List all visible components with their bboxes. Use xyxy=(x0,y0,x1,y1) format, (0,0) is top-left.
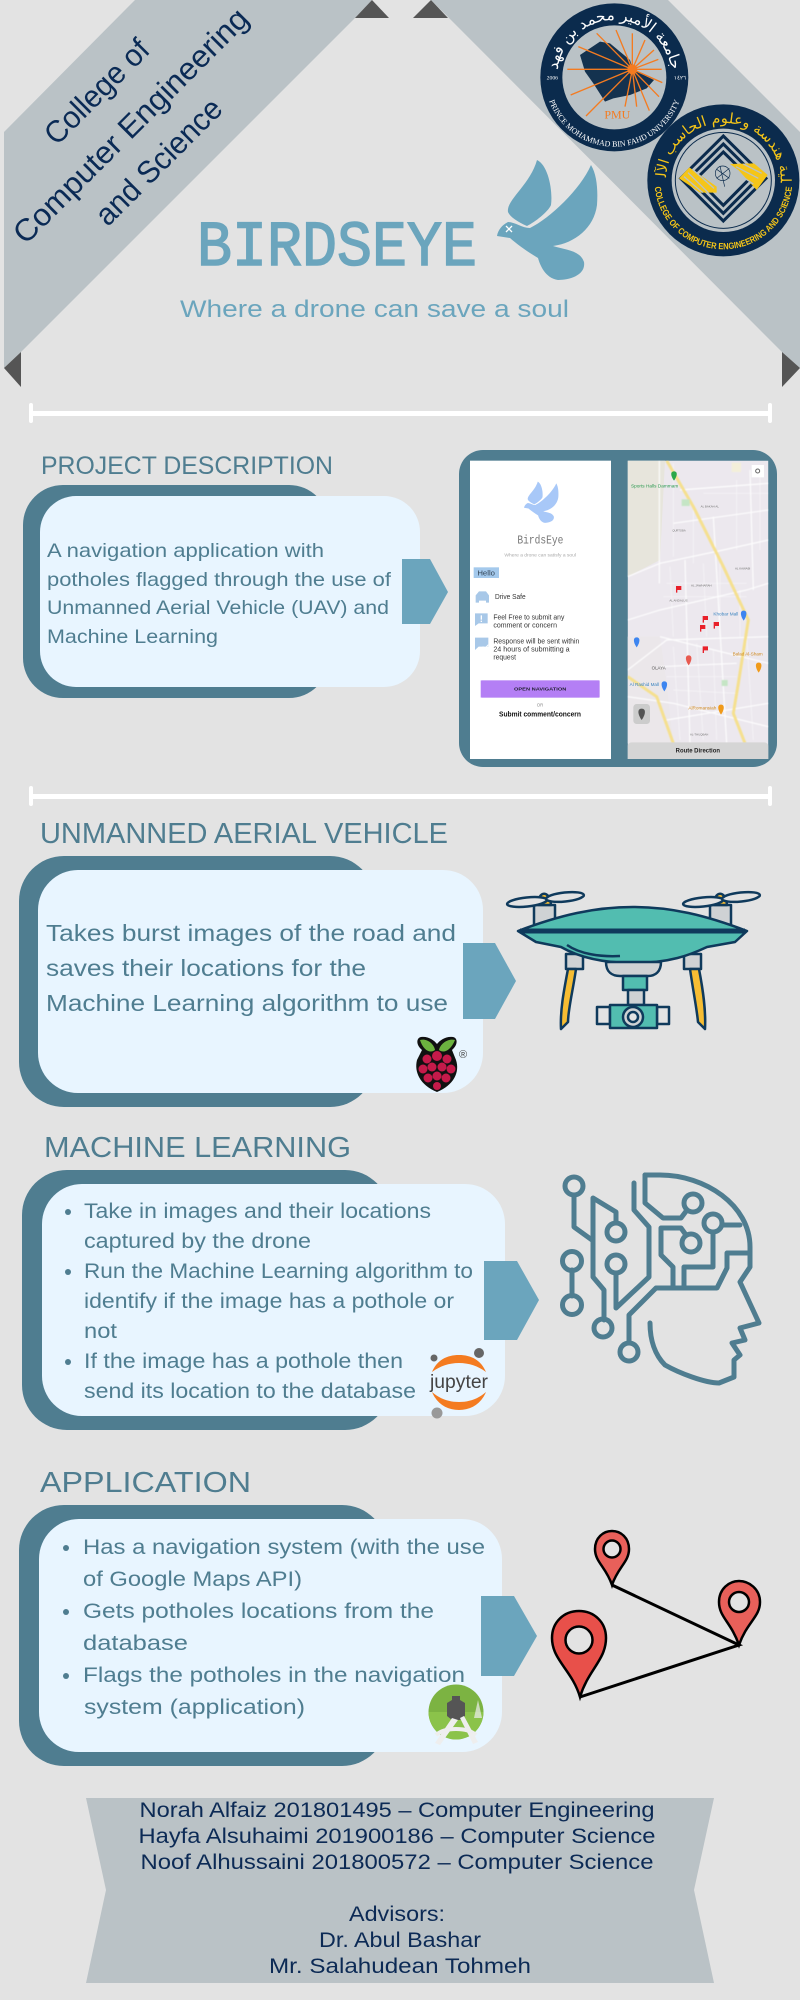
application bullet list xyxy=(63,1536,485,1719)
authors: Norah Alfaiz 201801495 – Computer Engineering xyxy=(140,1799,654,1822)
icon: raspberry pi: ® xyxy=(459,1049,467,1061)
arrow xyxy=(402,559,448,624)
icon: jupyter xyxy=(429,1348,489,1418)
advisors: Dr. Abul Bashar xyxy=(319,1929,481,1952)
pin: right xyxy=(719,1581,760,1645)
panel: project description xyxy=(23,485,420,698)
phone screen: home: OPEN NAVIGATION xyxy=(514,687,567,693)
application bullet list: Flags the potholes in the navigation xyxy=(83,1664,465,1687)
arrow xyxy=(484,1261,539,1340)
phone screen: home: comment or concern xyxy=(493,620,557,629)
application bullet list: database xyxy=(83,1632,188,1655)
phone screen: map: AL-THUQBAH xyxy=(690,733,708,737)
divider xyxy=(29,786,772,806)
phone screen: map: Route Direction xyxy=(676,747,720,754)
advisors: Mr. Salahudean Tohmeh xyxy=(269,1955,531,1978)
tagline: Where a drone can save a soul xyxy=(180,296,569,323)
college name: College of xyxy=(37,32,157,151)
machine learning bullet list: Take in images and their locations xyxy=(84,1200,431,1223)
phone screen: map: AL ANDALUS xyxy=(669,598,688,602)
phone screen: map: Khobar Mall xyxy=(713,612,738,618)
icon: dove logo xyxy=(497,160,597,280)
camera gimbal xyxy=(597,962,669,1028)
advisors xyxy=(269,1903,531,1978)
icon: jupyter: jupyter xyxy=(429,1372,489,1393)
college name: and Science xyxy=(88,91,229,232)
authors xyxy=(138,1799,656,1874)
application bullet list: system (application) xyxy=(84,1696,305,1719)
machine learning bullet list: If the image has a pothole then xyxy=(84,1350,403,1373)
machine learning bullet list: Run the Machine Learning algorithm to xyxy=(84,1260,473,1283)
phone screen: home: Hello xyxy=(477,569,495,578)
pin: large xyxy=(552,1611,606,1697)
icon: drone xyxy=(507,891,760,1029)
logo: College of Computer Engineering and Science: COLLEGE OF COMPUTER ENGINEERING AND SCIENCE xyxy=(654,186,792,250)
phone screen: home: OR xyxy=(537,702,543,707)
panel: application screenshots xyxy=(459,450,777,767)
logo: Prince Mohammad Bin Fahd University: جامعة الأمير محمد بن فهد xyxy=(552,14,680,70)
machine learning bullet list: identify if the image has a pothole or xyxy=(84,1290,454,1313)
phone screen: map xyxy=(628,461,768,759)
logo: Prince Mohammad Bin Fahd University: 2006 xyxy=(547,75,558,81)
phone screen: home: request xyxy=(493,652,516,661)
icon: raspberry pi xyxy=(416,1037,467,1092)
phone screen: map: Sports Halls Dammam xyxy=(631,483,678,489)
phone screen: map: QURTOBA xyxy=(672,528,686,532)
left ribbon banner xyxy=(4,0,389,387)
application bullet list: Has a navigation system (with the use xyxy=(83,1536,485,1559)
phone screen: home xyxy=(470,461,611,759)
phone screen: map: AL BAKAH AL xyxy=(701,504,719,508)
drone body xyxy=(518,907,747,963)
logo: Prince Mohammad Bin Fahd University: PMU xyxy=(604,107,631,121)
project description text: Machine Learning xyxy=(47,626,218,648)
machine learning bullet list: send its location to the database xyxy=(84,1380,416,1403)
logo: College of Computer Engineering and Science xyxy=(647,104,800,256)
logo: Prince Mohammad Bin Fahd University: PRINCE MOHAMMAD BIN FAHD UNIVERSITY xyxy=(549,99,679,147)
phone screen: home: Response will be sent within xyxy=(493,636,579,645)
panel: machine learning xyxy=(22,1170,505,1430)
project description text: A navigation application with xyxy=(47,540,324,562)
left rotor xyxy=(507,891,584,925)
phone screen: home: Feel Free to submit any xyxy=(493,612,565,621)
icon: android studio xyxy=(428,1684,484,1745)
heading: machine learning: MACHINE LEARNING xyxy=(44,1132,351,1164)
divider xyxy=(29,403,772,423)
phone screen: map: AL JAWHARAH xyxy=(691,583,712,587)
machine learning bullet list: captured by the drone xyxy=(84,1230,311,1253)
phone screen: map: AlRomansiah xyxy=(688,706,717,711)
phone screen: map: OLAYA xyxy=(652,665,667,670)
panel: unmanned aerial vehicle xyxy=(19,856,483,1107)
pin: top xyxy=(595,1531,629,1585)
machine learning bullet list xyxy=(65,1200,473,1403)
right ribbon banner xyxy=(413,0,800,387)
UAV description text: saves their locations for the xyxy=(46,955,366,981)
college name: Computer Engineering xyxy=(6,1,255,250)
icon: AI head xyxy=(562,1175,759,1383)
authors: Hayfa Alsuhaimi 201900186 – Computer Science xyxy=(138,1825,656,1848)
arrow xyxy=(463,943,516,1019)
UAV description text xyxy=(46,920,456,1016)
machine learning bullet list: not xyxy=(84,1320,117,1343)
phone screen: home: Drive Safe xyxy=(495,592,526,601)
logo: Prince Mohammad Bin Fahd University xyxy=(540,3,688,152)
arrow xyxy=(481,1596,537,1676)
phone screen: map: Balad Al-Sham xyxy=(733,652,763,657)
phone screen: home: Where a drone can satisfy a soul xyxy=(504,552,576,557)
right rotor xyxy=(683,891,760,925)
phone screen: home: BirdsEye xyxy=(517,533,563,547)
UAV description text: Takes burst images of the road and xyxy=(46,920,456,946)
project description text: Unmanned Aerial Vehicle (UAV) and xyxy=(47,597,389,619)
logo: Prince Mohammad Bin Fahd University: ١٤٢٦ xyxy=(674,74,686,81)
advisors: Advisors: xyxy=(349,1903,445,1926)
phone screen: map: AL KAWABI xyxy=(735,566,750,570)
title: BIRDSEYE xyxy=(197,213,477,285)
project description text xyxy=(47,540,392,648)
heading: unmanned aerial vehicle: UNMANNED AERIAL VEHICLE xyxy=(40,818,448,850)
UAV description text: Machine Learning algorithm to use xyxy=(46,990,448,1016)
application bullet list: Gets potholes locations from the xyxy=(83,1600,434,1623)
footer ribbon: authors and advisors xyxy=(86,1798,714,1983)
phone screen: map: Al Rashid Mall xyxy=(630,682,659,687)
icon: route with map pins xyxy=(552,1531,760,1697)
heading: project description: PROJECT DESCRIPTION xyxy=(41,452,333,480)
panel: application xyxy=(19,1505,502,1766)
heading: application: APPLICATION xyxy=(40,1467,251,1499)
application bullet list: of Google Maps API) xyxy=(83,1568,302,1591)
project description text: potholes flagged through the use of xyxy=(47,569,392,591)
landing legs xyxy=(561,954,705,1029)
phone screen: home: 24 hours of submitting a xyxy=(493,644,571,653)
phone screen: home: Submit comment/concern xyxy=(499,712,581,719)
authors: Noof Alhussaini 201800572 – Computer Science xyxy=(140,1851,654,1874)
